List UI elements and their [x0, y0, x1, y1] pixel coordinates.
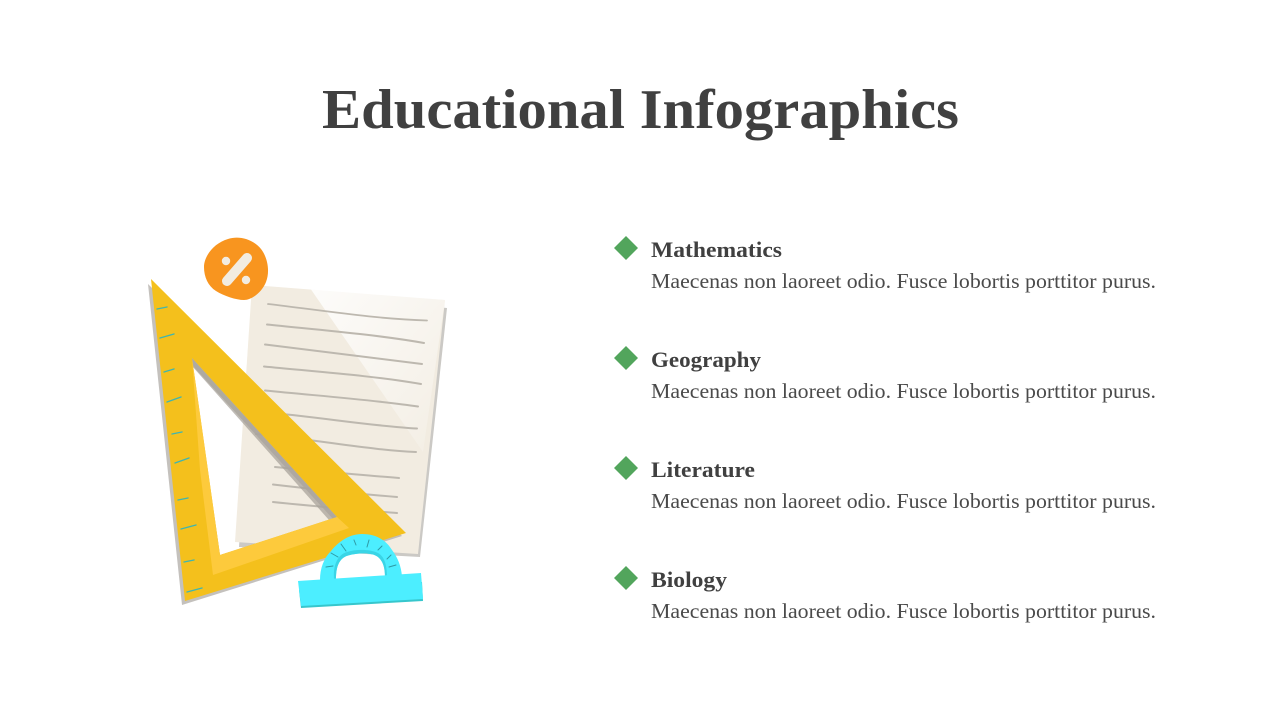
list item: Biology: Biology: [651, 567, 728, 592]
icon: protractor: [298, 534, 423, 608]
list item: Mathematics: [614, 236, 1156, 293]
list item: Biology: [614, 566, 1156, 623]
icon: diamond bullet: [614, 236, 638, 260]
title: Educational Infographics: [322, 79, 959, 141]
list item: Literature: [614, 456, 1156, 513]
icon: diamond bullet: [614, 346, 638, 370]
list item: Geography: [614, 346, 1156, 403]
icon: diamond bullet: [614, 566, 638, 590]
list item: Mathematics: Maecenas non laoreet odio. Fusce lobortis porttitor purus.: [651, 269, 1156, 293]
illustration: school supplies: [148, 238, 447, 608]
icon: set square ruler: [148, 279, 406, 605]
list item: Biology: Maecenas non laoreet odio. Fusce lobortis porttitor purus.: [651, 599, 1156, 623]
icon: lined paper sheet: [235, 285, 447, 557]
list item: Geography: Maecenas non laoreet odio. Fusce lobortis porttitor purus.: [651, 379, 1156, 403]
list item: Mathematics: Mathematics: [651, 237, 782, 262]
list item: Literature: Literature: [651, 457, 755, 482]
list item: Literature: Maecenas non laoreet odio. Fusce lobortis porttitor purus.: [651, 489, 1156, 513]
icon: percent badge: [204, 238, 268, 300]
list item: Geography: Geography: [651, 347, 762, 372]
icon: diamond bullet: [614, 456, 638, 480]
